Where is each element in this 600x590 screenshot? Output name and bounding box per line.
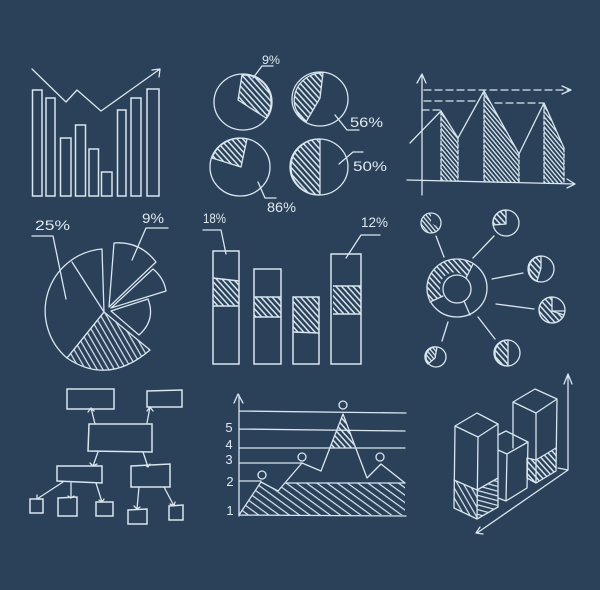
label 12%: 12%: [361, 214, 388, 230]
line: [239, 414, 405, 515]
bars: [32, 89, 159, 196]
grid and axis: [234, 394, 406, 516]
panel: flow chart: [30, 389, 183, 524]
panel: exploded pie chart: [32, 210, 168, 370]
pie 50%: [290, 139, 387, 195]
axis numbers: 5: [225, 420, 233, 435]
middle box: [498, 431, 528, 501]
hatched bands: [213, 278, 361, 333]
pie 50%: 50%: [353, 158, 387, 174]
columns: [213, 251, 361, 364]
satellite pie right upper: [528, 256, 554, 282]
satellite pie top middle: [493, 210, 519, 236]
pie 9%: 9%: [262, 53, 280, 67]
satellite pie top left: [421, 213, 441, 233]
satellite pie bottom middle: [494, 340, 520, 366]
arrowhead: [562, 86, 571, 94]
dashed level lines: [422, 90, 570, 110]
axes: [407, 74, 575, 195]
panel: donut with satellite pies: [421, 210, 565, 367]
panel: area chart with numbered levels: [225, 394, 406, 518]
panel: bar chart with trend arrow: [32, 69, 160, 196]
hatched areas: [441, 91, 564, 183]
panel: 3D bar chart: [454, 374, 572, 534]
pie 56%: [292, 72, 383, 130]
panel: column chart with hatched bands: [203, 210, 388, 364]
dashed verticals: [441, 91, 564, 183]
arrows: [37, 407, 175, 509]
pie 9%: [214, 53, 280, 130]
axis numbers: 4: [225, 437, 233, 452]
axis numbers: 2: [226, 474, 234, 489]
label 25%: 25%: [35, 217, 70, 233]
pie 56%: 56%: [350, 114, 383, 130]
axis numbers: [225, 420, 234, 518]
main wedge: [45, 249, 104, 358]
label 18%: 18%: [203, 210, 226, 226]
label 9%: 9%: [142, 210, 164, 226]
exploded wedges: [109, 243, 156, 307]
line: [410, 91, 564, 154]
right box: [513, 389, 557, 483]
trend arrow: [32, 69, 160, 111]
label 12%: [346, 214, 388, 258]
label 25%: [32, 217, 70, 299]
panel: four pie charts: [210, 53, 387, 215]
axis numbers: 1: [226, 503, 234, 518]
boxes: [30, 389, 183, 524]
axes: [476, 374, 572, 534]
pie 86%: [210, 138, 296, 215]
left box: [454, 413, 498, 519]
label 9%: [132, 210, 168, 260]
satellite pie bottom left: [425, 347, 446, 367]
hatched areas: [239, 414, 405, 515]
axis numbers: 3: [225, 452, 233, 467]
satellite pie right lower: [539, 297, 565, 323]
donut: [426, 259, 487, 317]
label 18%: [203, 210, 226, 254]
hatched wedge: [67, 312, 150, 370]
markers: [258, 401, 384, 479]
pie 86%: 86%: [267, 199, 296, 215]
connectors: [436, 236, 534, 341]
panel: area chart with dashed levels: [407, 74, 575, 195]
